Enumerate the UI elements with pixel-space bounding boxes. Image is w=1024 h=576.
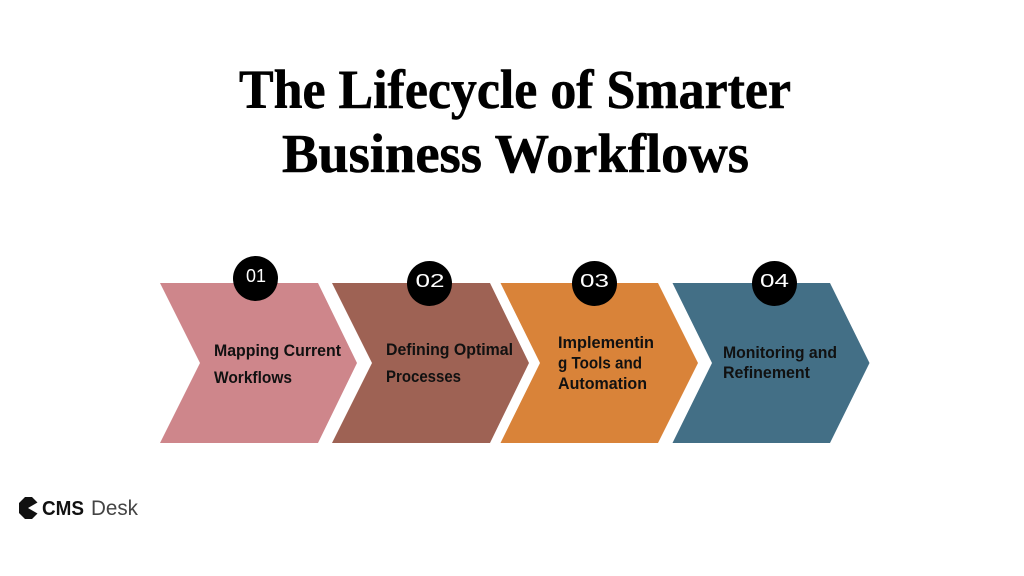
logo: CMS Desk: Desk — [91, 497, 138, 520]
step 3 label: Implementin — [558, 334, 654, 352]
step 4 label: Refinement — [723, 364, 810, 382]
number badge 03 — [572, 261, 617, 306]
number badge 04: 04 — [760, 271, 789, 291]
number badge 01: 01 — [246, 266, 266, 286]
panel: step 3 chevron — [500, 283, 698, 443]
step 4 label — [723, 344, 837, 382]
logo: CMS Desk — [19, 497, 138, 520]
step 2 label: Defining Optimal — [386, 341, 513, 359]
step 2 label: Processes — [386, 368, 461, 386]
number badge 04 — [752, 261, 797, 306]
step 3 label: g Tools and — [558, 354, 642, 372]
panel: step 4 chevron — [672, 283, 870, 443]
title — [239, 59, 791, 184]
step 1 label: Mapping Current — [214, 342, 341, 360]
number badge 03: 03 — [580, 271, 609, 291]
title: The Lifecycle of Smarter — [239, 59, 791, 120]
panel: step 1 chevron — [160, 283, 357, 443]
number badge 02: 02 — [416, 271, 444, 291]
logo: CMS Desk: CMS — [42, 498, 84, 520]
number badge 02 — [407, 261, 452, 306]
step 3 label — [558, 334, 654, 393]
step 2 label — [386, 341, 513, 386]
panel: step 2 chevron — [332, 283, 529, 443]
step 1 label: Workflows — [214, 369, 292, 387]
step 1 label — [214, 342, 341, 387]
number badge 01 — [233, 256, 278, 301]
step 4 label: Monitoring and — [723, 344, 837, 362]
title: Business Workflows — [282, 123, 749, 184]
step 3 label: Automation — [558, 375, 647, 393]
icon: logo mark — [19, 497, 38, 519]
